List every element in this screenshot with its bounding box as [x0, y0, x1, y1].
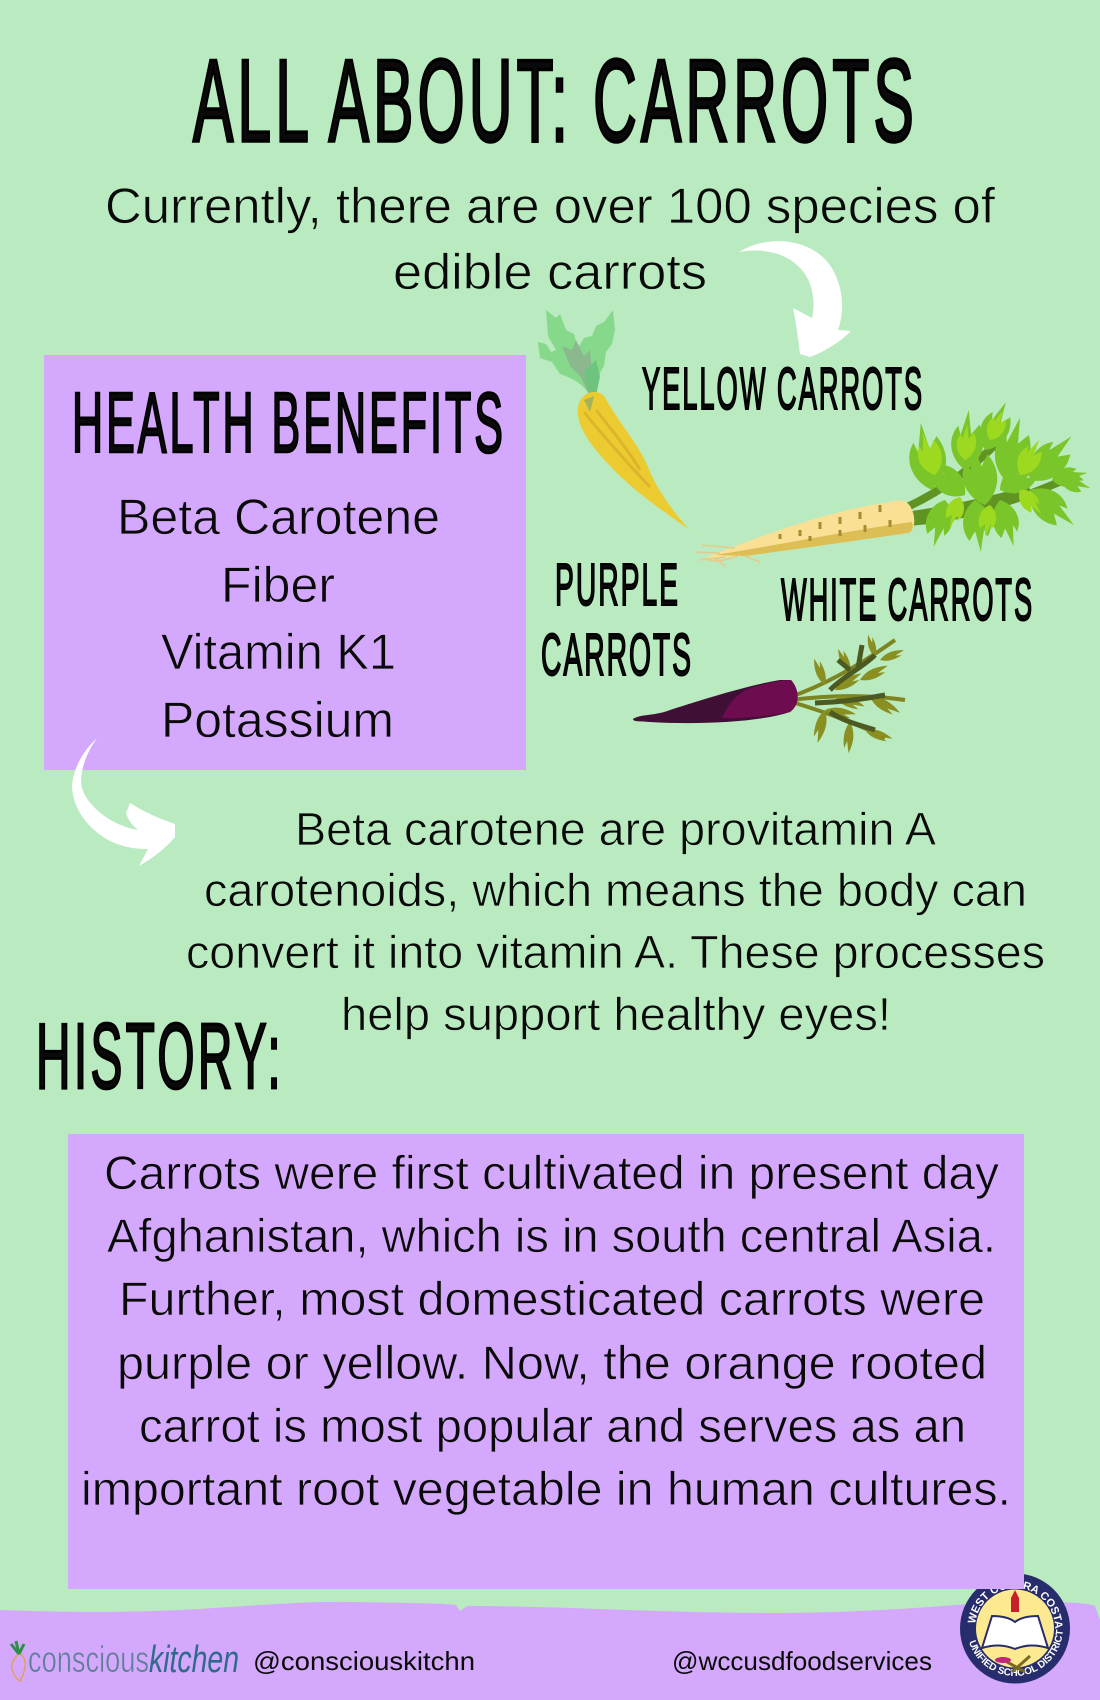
logo: conscious kitchen: kitchen [149, 1639, 239, 1681]
history text: Afghanistan, which is in south central Asia. [107, 1209, 996, 1262]
icon: purple carrot [633, 633, 906, 753]
icon: yellow carrot [538, 310, 690, 530]
text: CARROTS [541, 622, 693, 688]
logo: conscious kitchen: conscious [28, 1639, 149, 1680]
text: beta carotene note [186, 803, 1045, 1040]
history text: important root vegetable in human cultures. [81, 1462, 1011, 1515]
benefits list: Potassium [161, 692, 394, 748]
history text: Carrots were first cultivated in present day [104, 1146, 999, 1199]
social handle: food services: @wccusdfoodservices [672, 1646, 932, 1676]
arrow: to yellow carrots [739, 241, 851, 357]
benefits list: Beta Carotene [117, 489, 440, 545]
icon: school district seal: UNIFIED SCHOOL DISTRICT [970, 1629, 1063, 1676]
benefits list: Vitamin K1 [161, 624, 396, 680]
panel: health benefits [44, 355, 526, 770]
history text: carrot is most popular and serves as an [139, 1399, 966, 1452]
footer band [0, 1602, 1100, 1700]
heading: health benefits: HEALTH BENEFITS [72, 376, 506, 471]
panel: history [68, 1134, 1024, 1589]
icon: white carrot [695, 397, 1093, 566]
intro text: edible carrots [393, 244, 707, 300]
text: beta carotene note: carotenoids, which means the body can [204, 864, 1027, 916]
intro text [105, 178, 995, 300]
text: beta carotene note: convert it into vitamin A. These processes [186, 926, 1045, 978]
label: purple carrots: PURPLE [555, 552, 680, 618]
heading: history: HISTORY: [36, 1004, 284, 1108]
arrow: to beta carotene note [72, 738, 175, 866]
history text: purple or yellow. Now, the orange rooted [117, 1336, 987, 1389]
label: purple carrots [541, 552, 693, 688]
text: beta carotene note: help support healthy eyes! [341, 988, 891, 1040]
intro text: Currently, there are over 100 species of [105, 178, 995, 234]
icon: school district seal [960, 1574, 1070, 1684]
benefits list [117, 489, 440, 748]
icon: school district seal: WEST CONTRA COSTA [968, 1581, 1063, 1629]
benefits list: Fiber [221, 557, 335, 613]
history text [81, 1146, 1011, 1515]
text: beta carotene note: Beta carotene are provitamin A [295, 803, 936, 855]
history text: Further, most domesticated carrots were [119, 1272, 985, 1325]
social handle: conscious kitchen: @consciouskitchn [253, 1646, 475, 1676]
